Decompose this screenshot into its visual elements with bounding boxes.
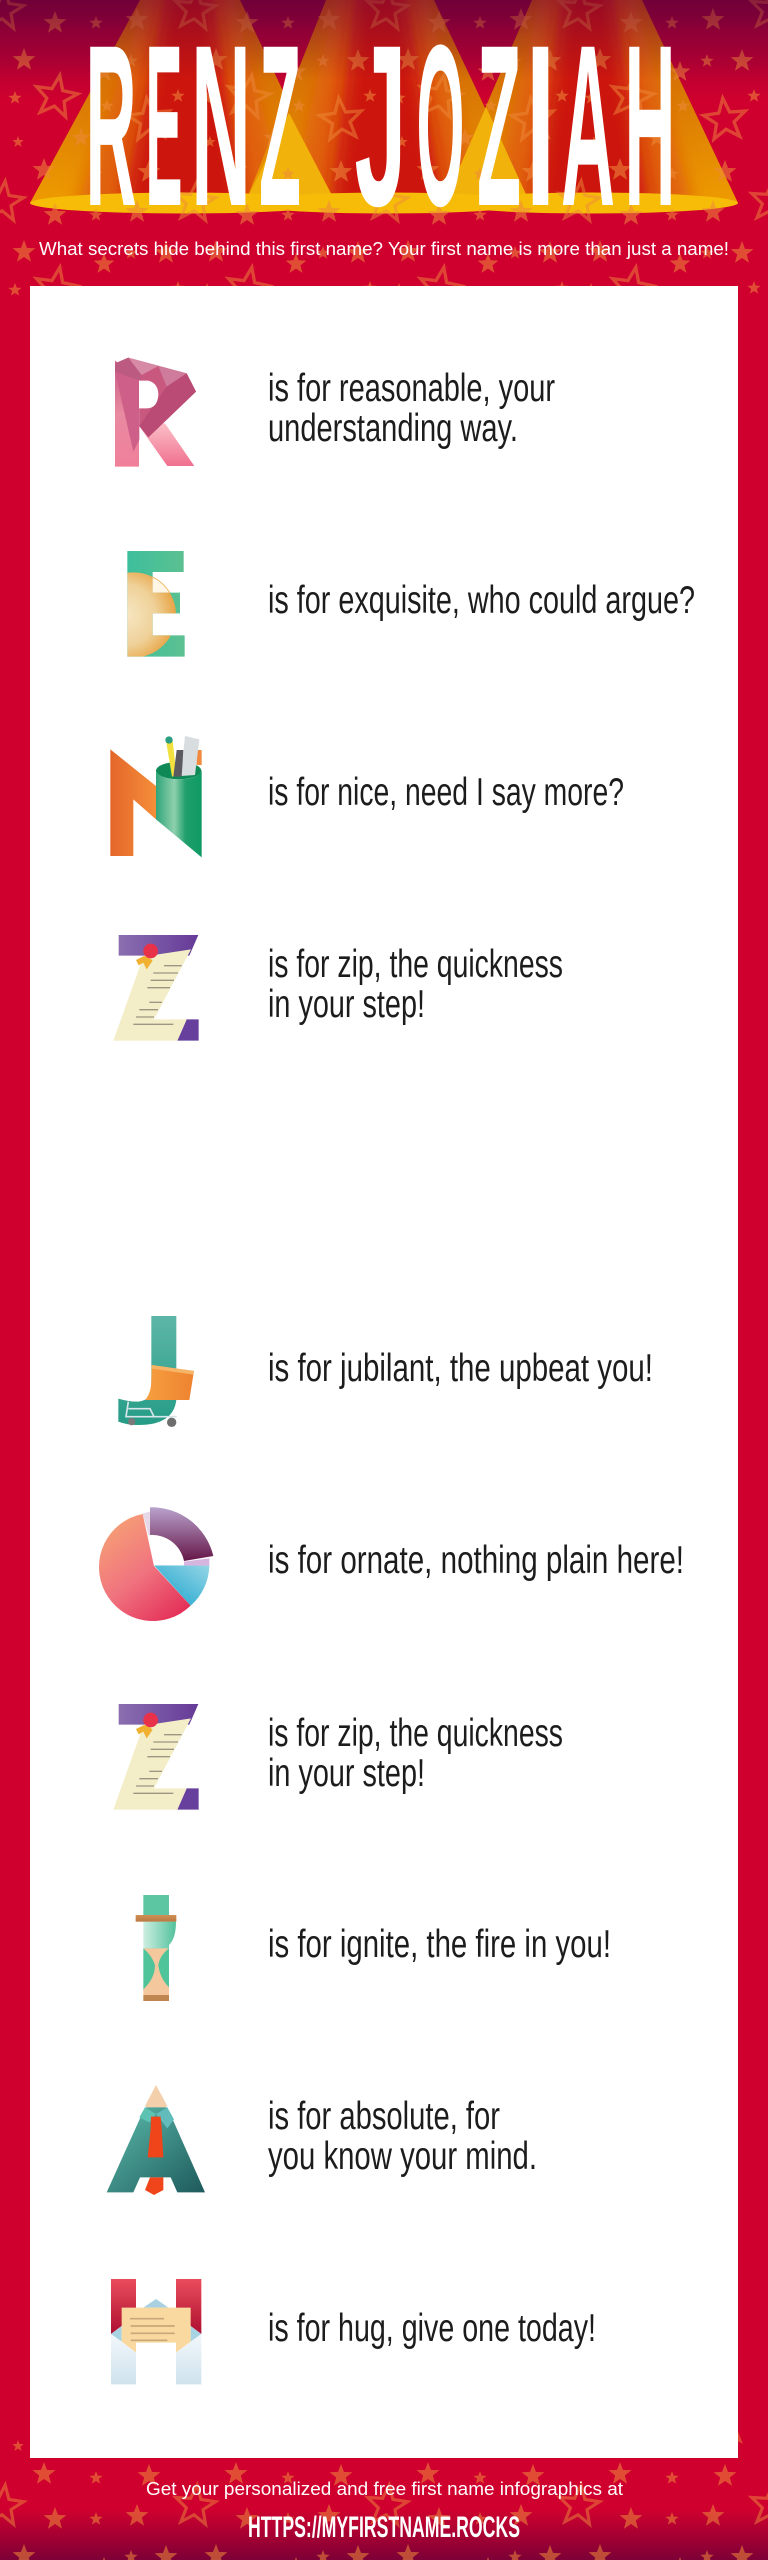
- text: zip: [268, 943, 563, 1026]
- text: zip repeat: [268, 1712, 563, 1795]
- footer text: Get your personalized and free first name infographics at: [146, 2479, 623, 2499]
- title: I: [526, 0, 556, 254]
- text: hug: is for hug, give one today!: [268, 2307, 596, 2350]
- subtitle: What secrets hide behind this first name? Your first name is more than just a name!: [39, 239, 729, 259]
- title: O: [416, 0, 464, 254]
- icon: letter A suit and tie: [107, 2085, 205, 2195]
- text: zip repeat: is for zip, the quickness: [268, 1712, 563, 1755]
- text: nice: is for nice, need I say more?: [268, 771, 624, 814]
- title: R: [86, 0, 136, 254]
- title: A: [561, 0, 615, 254]
- icon: letter Z diploma: [113, 935, 199, 1041]
- icon: letter O pie chart: [99, 1507, 213, 1621]
- footer url: HTTPS://MYFIRSTNAME.ROCKS: [248, 2511, 520, 2544]
- title: J: [354, 0, 406, 254]
- icon: letter I hourglass: [136, 1895, 176, 2001]
- title: Z: [477, 0, 521, 254]
- text: zip repeat: in your step!: [268, 1752, 425, 1795]
- icon: letter Z diploma repeat: [113, 1704, 199, 1810]
- icon: letter J cart: [118, 1316, 194, 1427]
- icon: letter N pencil cup: [110, 736, 202, 857]
- text: reasonable: is for reasonable, your: [268, 367, 555, 410]
- icon: letter H envelope: [111, 2279, 201, 2384]
- text: zip: is for zip, the quickness: [268, 943, 563, 986]
- title: N: [191, 0, 251, 254]
- title: E: [146, 0, 182, 254]
- spotlights: [20, 0, 740, 214]
- icon: letter E coin: [127, 551, 185, 657]
- icon: letter R gem: [115, 358, 196, 467]
- text: absolute: you know your mind.: [268, 2135, 537, 2178]
- title: Z: [259, 0, 301, 254]
- text: zip: in your step!: [268, 983, 425, 1026]
- text: absolute: [268, 2095, 537, 2178]
- text: ignite: is for ignite, the fire in you!: [268, 1923, 611, 1966]
- text: reasonable: [268, 367, 555, 450]
- text: absolute: is for absolute, for: [268, 2095, 500, 2138]
- panel: letters: [30, 286, 738, 2458]
- text: jubilant: is for jubilant, the upbeat you!: [268, 1347, 653, 1390]
- text: reasonable: understanding way.: [268, 407, 518, 450]
